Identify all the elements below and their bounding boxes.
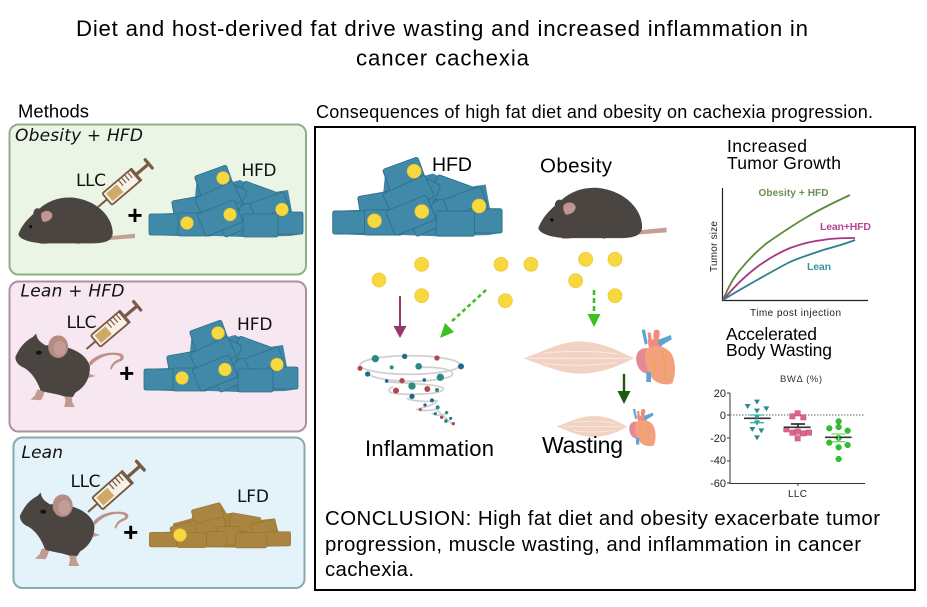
icon: wasted heart bbox=[629, 409, 656, 446]
panel: Lean + HFD bbox=[10, 282, 306, 432]
title: cancer cachexia bbox=[356, 46, 530, 70]
arrow: fat to inflammation (dashed) bbox=[440, 290, 486, 338]
panel background bbox=[10, 282, 306, 432]
icon: inflammation tornado bbox=[357, 354, 464, 425]
label: LLC: LLC bbox=[76, 171, 106, 191]
title: Diet and host-derived fat drive wasting and increased inflammation in bbox=[76, 16, 808, 41]
plus sign: + bbox=[127, 200, 143, 230]
heading: methods: Methods bbox=[18, 100, 89, 122]
conclusion text bbox=[325, 508, 880, 581]
label: HFD: HFD bbox=[237, 315, 272, 335]
fat droplets bbox=[372, 252, 622, 308]
panel label: Obesity + HFD bbox=[15, 126, 143, 146]
chart: body weight change scatter: -60 bbox=[710, 478, 726, 490]
heading: increased tumor growth: Tumor Growth bbox=[727, 153, 841, 173]
chart: tumor size line chart: Time post injection bbox=[750, 308, 841, 319]
heading: increased tumor growth: Increased bbox=[727, 136, 807, 156]
panel background bbox=[14, 438, 304, 588]
chart: body weight change scatter: LLC bbox=[788, 489, 807, 500]
icon: syringe bbox=[92, 156, 155, 213]
icon: obese mouse bbox=[538, 188, 667, 239]
icon: high fat diet pellets bbox=[149, 165, 303, 238]
chart: body weight change scatter: -40 bbox=[710, 455, 726, 467]
arrow: fat to inflammation (solid) bbox=[394, 296, 406, 338]
panel label: Lean + HFD bbox=[20, 282, 124, 302]
label: Inflammation: Inflammation bbox=[365, 436, 494, 461]
box outline bbox=[315, 127, 915, 590]
label: HFD: HFD bbox=[432, 154, 472, 176]
chart: tumor size line chart bbox=[709, 188, 871, 319]
icon: lean mouse bbox=[15, 334, 124, 407]
panel label: Lean bbox=[22, 443, 63, 463]
icon: syringe bbox=[81, 298, 144, 355]
heading: accelerated body wasting bbox=[726, 324, 832, 360]
chart: body weight change scatter: BWΔ (%) bbox=[780, 374, 822, 385]
label: Obesity: Obesity bbox=[540, 154, 613, 178]
plus sign: + bbox=[119, 358, 134, 388]
conclusion text: progression, muscle wasting, and inflammation in cancer bbox=[325, 534, 861, 556]
chart: tumor size line chart: Tumor size bbox=[709, 221, 720, 272]
heading: accelerated body wasting: Accelerated bbox=[726, 324, 817, 344]
icon: syringe bbox=[82, 458, 148, 519]
chart: tumor size line chart: Lean bbox=[807, 261, 831, 273]
conclusion text: cachexia. bbox=[325, 559, 414, 581]
arrow: obesity to muscle and heart (dashed) bbox=[588, 290, 600, 327]
chart: tumor size line chart: Obesity + HFD bbox=[758, 188, 828, 199]
heading: consequences: Consequences of high fat diet and obesity on cachexia progression. bbox=[316, 102, 873, 122]
heading: accelerated body wasting: Body Wasting bbox=[726, 340, 832, 360]
label: LFD: LFD bbox=[237, 487, 269, 507]
chart: body weight change scatter: -20 bbox=[710, 433, 726, 445]
heading: increased tumor growth bbox=[727, 136, 841, 173]
icon: obese mouse bbox=[18, 198, 135, 244]
title bbox=[76, 16, 808, 70]
panel: Obesity + HFD bbox=[10, 124, 306, 274]
panel background bbox=[10, 124, 306, 274]
chart: body weight change scatter bbox=[710, 374, 865, 500]
chart: body weight change scatter: 20 bbox=[714, 388, 726, 400]
chart: tumor size line chart: Lean+HFD bbox=[820, 221, 871, 233]
label: LLC: LLC bbox=[66, 313, 96, 333]
label: HFD: HFD bbox=[242, 161, 276, 181]
chart: body weight change scatter: 0 bbox=[720, 410, 726, 422]
icon: lean mouse bbox=[20, 493, 128, 566]
icon: high fat diet pellets bbox=[333, 157, 502, 237]
icon: healthy heart bbox=[636, 329, 675, 384]
label: Wasting: Wasting bbox=[542, 432, 623, 458]
arrow: muscle to wasting bbox=[618, 374, 630, 404]
label: LLC: LLC bbox=[70, 472, 100, 492]
icon: high fat diet pellets bbox=[144, 320, 298, 393]
conclusion text: CONCLUSION: High fat diet and obesity exacerbate tumor bbox=[325, 508, 880, 530]
panel: consequences box bbox=[315, 127, 915, 590]
icon: low fat diet pellets bbox=[149, 502, 291, 548]
panel: Lean bbox=[14, 438, 304, 588]
plus sign: + bbox=[123, 517, 138, 547]
icon: healthy muscle bbox=[523, 341, 634, 374]
icon: wasted muscle bbox=[557, 416, 627, 437]
